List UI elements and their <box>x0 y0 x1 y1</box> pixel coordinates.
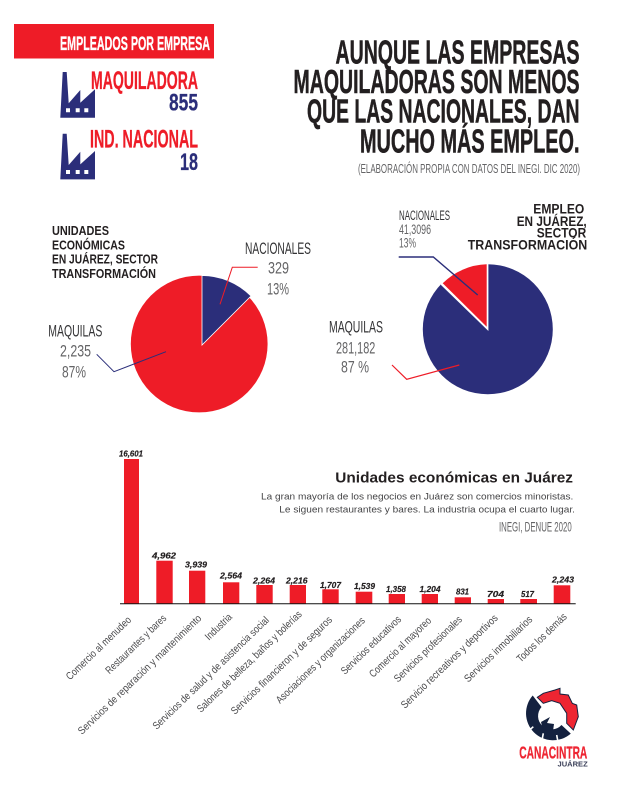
banner: empleados por empresa <box>14 24 214 58</box>
logo: Canacintra Juárez <box>519 688 588 769</box>
callout: nacionales pie 2 <box>399 208 478 295</box>
bar values: 831 <box>456 587 469 597</box>
category labels: Comercio al menudeo <box>64 614 134 683</box>
bars <box>124 459 570 604</box>
bar values: 1,204 <box>420 584 441 594</box>
bar chart: unidades económicas en Juárez <box>64 449 576 737</box>
title <box>294 34 580 160</box>
callout: nacionales pie 2: 41,3096 <box>399 222 431 237</box>
icon: factory maquiladora <box>60 72 95 118</box>
bar values: 704 <box>487 589 504 599</box>
stat: industria nacional 18: IND. NACIONAL <box>90 127 198 154</box>
callout: nacionales pie 2: NACIONALES <box>399 208 450 223</box>
chart description: Le siguen restaurantes y bares. La industria ocupa el cuarto lugar. <box>279 505 575 516</box>
category labels: Servicios profesionales <box>392 614 465 685</box>
bar values: 4,962 <box>151 551 176 561</box>
callout: nacionales pie 1: NACIONALES <box>245 239 311 258</box>
callout: maquilas pie 2 <box>329 317 459 379</box>
callout: maquilas pie 1: MAQUILAS <box>48 322 102 341</box>
heading: unidades económicas: EN JUÁREZ, SECTOR <box>52 252 158 267</box>
stat: industria nacional 18: 18 <box>180 149 198 176</box>
bar values: 1,539 <box>354 581 375 591</box>
bar values: 2,264 <box>252 575 275 585</box>
pie chart: unidades económicas <box>131 276 268 412</box>
bar values: 1,707 <box>320 580 342 590</box>
category labels: Servicios financieron y de seguros <box>229 614 335 717</box>
icon: gear ring <box>526 688 578 742</box>
heading: empleo <box>468 202 587 252</box>
category labels: Todos los demás <box>514 611 570 665</box>
stat: industria nacional 18 <box>90 127 198 176</box>
callout: nacionales pie 1 <box>220 239 311 304</box>
callout: nacionales pie 2: 13% <box>399 235 416 250</box>
category labels: Servicios de salud y de asistencia social <box>150 614 272 732</box>
category labels: Servicios de reparación y mantenimiento <box>76 612 204 737</box>
heading: unidades económicas <box>52 224 158 281</box>
stat: maquiladora 855: MAQUILADORA <box>91 68 198 95</box>
callout: nacionales pie 1: 13% <box>267 279 289 298</box>
logo: Canacintra Juárez: JUÁREZ <box>558 760 588 769</box>
callout: maquilas pie 1 <box>48 322 166 382</box>
category labels: Comercio al mayoreo <box>367 615 434 680</box>
bar values: 2,243 <box>551 574 574 584</box>
callout: nacionales pie 1: 329 <box>268 258 289 277</box>
callout: maquilas pie 2: 281,182 <box>336 338 375 357</box>
bar values <box>119 449 574 599</box>
callout: maquilas pie 2: 87 % <box>341 358 369 377</box>
category labels: Industria <box>203 611 235 643</box>
chart description <box>261 492 575 516</box>
heading: empleo: EN JUÁREZ, <box>517 214 587 229</box>
callout: maquilas pie 1: 87% <box>62 363 86 382</box>
bar values: 3,939 <box>185 560 207 570</box>
category labels: Servicios inmobiliarios <box>462 614 535 685</box>
chart heading: Unidades económicas en Juárez <box>335 470 573 487</box>
bar values: 2,216 <box>285 575 308 585</box>
stat: maquiladora 855: 855 <box>169 90 198 117</box>
bar values: 2,564 <box>219 571 242 581</box>
stat: maquiladora 855 <box>91 68 198 117</box>
heading: empleo: EMPLEO <box>533 202 584 217</box>
category labels: Salones de belleza, baños y bolerías <box>195 609 305 715</box>
heading: empleo: SECTOR <box>537 226 586 241</box>
category labels: Asociaciones y organizaciones <box>274 615 368 706</box>
bar values: 517 <box>521 589 535 599</box>
heading: unidades económicas: ECONÓMICAS <box>52 237 125 252</box>
category labels <box>64 609 570 737</box>
banner: empleados por empresa: EMPLEADOS POR EMPRESA <box>60 34 210 55</box>
category labels: Restaurantes y bares <box>103 612 169 677</box>
heading: unidades económicas: TRANSFORMACIÓN <box>52 266 156 281</box>
bar values: 1,358 <box>386 584 406 594</box>
category labels: Servicios educativos <box>339 614 404 677</box>
icon: factory nacional <box>60 134 95 179</box>
bar values: 16,601 <box>119 449 143 459</box>
heading: empleo: TRANSFORMACIÓN <box>468 237 587 252</box>
callout: maquilas pie 2: MAQUILAS <box>329 317 383 336</box>
chart description: La gran mayoría de los negocios en Juárez son comercios minoristas. <box>261 492 573 503</box>
category labels: Servicio recreativos y deportivos <box>399 612 501 711</box>
heading: unidades económicas: UNIDADES <box>52 224 109 238</box>
callout: maquilas pie 1: 2,235 <box>60 342 91 361</box>
pie chart: empleo <box>423 262 553 394</box>
